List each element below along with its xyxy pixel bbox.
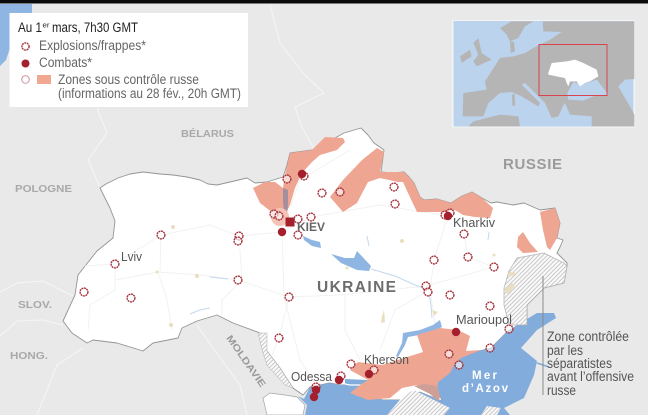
legend title: mars, 7h30 GMT xyxy=(52,20,138,35)
Kiev capital marker xyxy=(286,218,294,226)
Kiev halo xyxy=(271,208,289,226)
annotation: separatist zone: séparatistes xyxy=(547,356,612,371)
city label: Lviv: Lviv xyxy=(121,250,143,264)
annotation: separatist zone: par les xyxy=(547,343,583,358)
Black Sea and Sea of Azov xyxy=(298,313,556,415)
inset: Sardinia xyxy=(512,94,515,106)
inset: Great Britain xyxy=(473,38,492,66)
inset: Scandinavia xyxy=(500,21,533,41)
regional roads xyxy=(85,150,494,385)
Crimea east tip hatched xyxy=(481,406,501,415)
city label: Kherson: Kherson xyxy=(364,353,409,367)
combat markers xyxy=(278,170,460,401)
Dnipro estuary xyxy=(345,379,368,385)
country label: Ukraine: UKRAINE xyxy=(317,279,396,296)
country label: Slovaquie: SLOV. xyxy=(18,300,52,311)
Sivash lagoon xyxy=(414,384,440,401)
Budjak region xyxy=(263,393,305,415)
inset: continental Europe xyxy=(463,21,634,126)
country label: Bélarus: BÉLARUS xyxy=(181,127,234,140)
legend: combats xyxy=(22,55,93,70)
Donbas separatist zone xyxy=(504,253,567,325)
legend: explosions: Explosions/frappes* xyxy=(39,38,147,53)
inset: red frame xyxy=(539,44,607,96)
Kinburn spit xyxy=(340,383,362,385)
legend: Russian-controlled zones: Zones sous contrôle russe xyxy=(58,72,199,87)
top black rule xyxy=(0,0,648,4)
city label: Kiev: KIEV xyxy=(297,222,325,234)
Dnipro river and reservoirs xyxy=(303,236,442,357)
legend title xyxy=(18,20,138,35)
Baltic sea corner xyxy=(0,4,32,66)
country label: Russie: RUSSIE xyxy=(503,156,562,173)
legend: combats: Combats* xyxy=(39,55,93,70)
leader line for separatist zone xyxy=(542,276,544,395)
neighbouring borders xyxy=(0,5,324,415)
country label: Hongrie: HONG. xyxy=(10,351,48,362)
annotation: separatist zone: Zone contrôlée xyxy=(547,329,629,344)
annotation: separatist zone: russe xyxy=(547,383,576,398)
Transnistria hatched xyxy=(258,333,293,388)
sea label: Mer: Mer xyxy=(472,370,498,382)
inset: Black Sea xyxy=(567,80,608,101)
country label: Moldavie: MOLDAVIE xyxy=(224,333,268,390)
city label: Odessa: Odessa xyxy=(291,370,332,384)
annotation: separatist zone: avant l’offensive xyxy=(547,369,634,384)
sea label: d'Azov: d’Azov xyxy=(462,383,509,395)
inset: Ireland xyxy=(460,50,472,63)
legend title: Au 1 xyxy=(18,20,42,35)
city label: Kharkiv: Kharkiv xyxy=(453,216,496,230)
legend: Russian-controlled zones: (informations au 28 fév., 20h GMT) xyxy=(58,86,241,101)
Kiev reservoir xyxy=(283,188,288,214)
inset: Denmark xyxy=(510,41,515,53)
Crimea hatched xyxy=(387,390,450,415)
country label: Pologne: POLOGNE xyxy=(15,184,72,195)
legend title: er xyxy=(42,20,50,30)
inset: North Africa xyxy=(468,115,520,126)
urban patches xyxy=(156,225,515,327)
legend panel xyxy=(10,13,248,107)
Kerch river inlet xyxy=(537,363,549,367)
Ukraine territory xyxy=(63,128,567,401)
inset: Ukraine silhouette xyxy=(548,60,598,86)
explosion markers xyxy=(80,172,513,391)
minor rivers xyxy=(190,232,489,318)
occupied zones xyxy=(253,137,560,400)
inset locator map xyxy=(452,20,635,128)
city label: Marioupol: Marioupol xyxy=(456,313,512,327)
legend: Russian-controlled zones xyxy=(22,72,241,101)
